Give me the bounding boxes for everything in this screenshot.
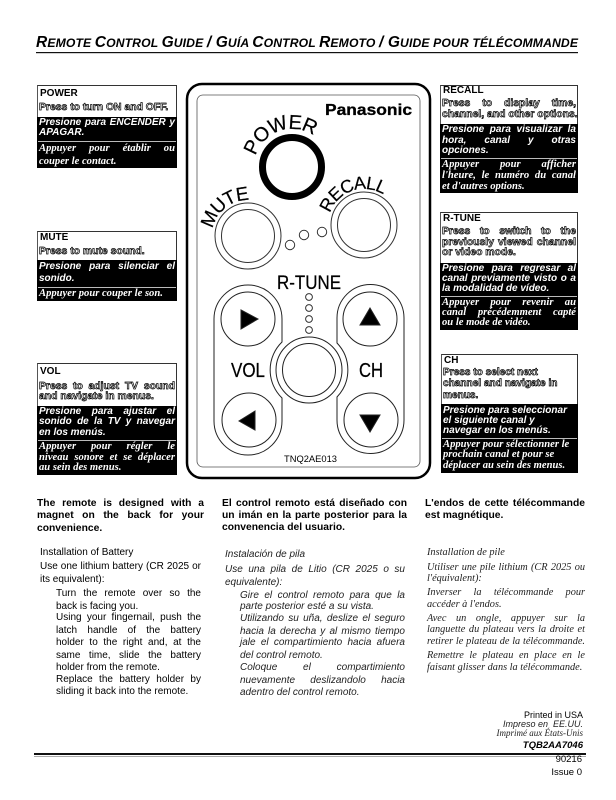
- text block: english instructions: back is facing you.: [56, 601, 138, 612]
- panel: vol callout: and navigate in menus.: [39, 391, 154, 402]
- text block: spanish instructions: [222, 498, 408, 698]
- text block: spanish instructions: El control remoto está diseñado con: [222, 498, 407, 509]
- mute button: [200, 186, 282, 270]
- panel: recall callout: channel, and other options.: [442, 109, 578, 120]
- power button: POWER: [243, 114, 317, 154]
- panel: ch callout: menus.: [443, 390, 478, 401]
- footer issue number: [551, 754, 582, 778]
- panel: recall callout: Presione para visualizar la: [442, 124, 576, 135]
- text block: english instructions: holder from the remote.: [56, 662, 160, 673]
- panel: ch callout: Presione para seleccionar: [443, 405, 567, 416]
- panel: recall callout: et d'autres options.: [442, 181, 525, 192]
- panel: mute callout: Appuyer pour couper le son.: [39, 288, 163, 299]
- footer imprint: [496, 710, 584, 751]
- panel: r-tune callout: ou le mode de vidéo.: [442, 317, 531, 328]
- panel: recall callout: [440, 85, 578, 193]
- panel: r-tune callout: la modalidad de vídeo.: [442, 283, 549, 294]
- footer imprint: Imprimé aux États-Unis: [496, 728, 583, 738]
- text block: french instructions: languette du plateau vers la droite et: [427, 624, 585, 635]
- panel: power callout: Presione para ENCENDER y: [39, 117, 175, 128]
- text block: french instructions: l'équivalent):: [427, 573, 482, 584]
- r-tune label: R-TUNE: [277, 272, 341, 294]
- brand logo: Panasonic: [325, 102, 412, 119]
- text block: spanish instructions: nuevamente deslizandolo hacia: [240, 675, 405, 686]
- text block: spanish instructions: Utilizando su uña, deslize el seguro: [240, 613, 405, 624]
- text block: english instructions: sliding it back into the remote.: [56, 686, 188, 697]
- panel: r-tune callout: [440, 212, 578, 330]
- panel: recall callout: RECALL: [443, 85, 484, 96]
- text block: english instructions: Using your fingernail, push the: [56, 612, 201, 623]
- panel: r-tune callout: R-TUNE: [443, 213, 481, 224]
- text block: spanish instructions: convenencia del usuario.: [222, 522, 345, 533]
- text block: spanish instructions: un imán en la parte posterior para la: [222, 510, 407, 521]
- panel: vol callout: au sein des menus.: [39, 462, 121, 473]
- panel: ch callout: CH: [444, 355, 458, 366]
- text block: spanish instructions: jale el compartimiento hacia afuera: [240, 637, 405, 648]
- panel: r-tune callout: Presione para regresar al: [442, 263, 576, 274]
- text block: spanish instructions: Coloque el compartimiento: [240, 662, 405, 673]
- panel: power callout: Appuyer pour établir ou: [39, 143, 175, 154]
- footer issue number: Issue 0: [551, 767, 582, 778]
- panel: mute callout: Presione para silenciar el: [39, 261, 175, 272]
- panel: ch callout: el siguiente canal y: [443, 415, 535, 426]
- panel: recall callout: opciones.: [442, 145, 489, 156]
- panel: vol callout: Press to adjust TV sound: [39, 381, 175, 392]
- text block: english instructions: its equivalent):: [40, 574, 104, 585]
- text block: english instructions: Installation of Battery: [40, 547, 133, 558]
- text block: french instructions: est magnétique.: [425, 510, 503, 521]
- panel: recall callout: hora, canal y otras: [442, 135, 576, 146]
- text block: spanish instructions: equivalente):: [225, 577, 282, 588]
- recall button: [319, 176, 398, 258]
- text block: english instructions: magnet on the back for your: [37, 510, 204, 521]
- r-tune dots: [306, 294, 312, 333]
- panel: ch callout: déplacer au sein des menus.: [443, 460, 565, 471]
- footer imprint: Impreso en EE.UU.: [503, 719, 583, 729]
- vol rocker: VOL: [231, 360, 265, 382]
- panel: ch callout: navegar en los menús.: [443, 425, 551, 436]
- panel: r-tune callout: Appuyer pour revenir au: [442, 297, 576, 308]
- panel: vol callout: [37, 363, 177, 475]
- panel: ch callout: Appuyer pour sélectionner le: [443, 439, 569, 450]
- panel: power callout: APAGAR.: [39, 127, 84, 138]
- text block: french instructions: Remettre le plateau en place en le: [427, 650, 585, 661]
- text block: spanish instructions: Gire el control remoto para que la: [240, 590, 405, 601]
- footer rule: [34, 753, 586, 757]
- text block: spanish instructions: adentro del control remoto.: [240, 687, 360, 698]
- text block: french instructions: Utiliser une pile lithium (CR 2025 ou: [427, 562, 585, 573]
- footer issue number: 90216: [556, 754, 582, 765]
- panel: r-tune callout: previously viewed channel: [442, 237, 576, 248]
- vol rocker: [214, 285, 282, 455]
- panel: r-tune callout: or video mode.: [442, 247, 516, 258]
- panel: r-tune callout: canal previamente visto o a: [442, 273, 576, 284]
- text block: french instructions: accéder à l'endos.: [427, 599, 502, 610]
- panel: mute callout: sonido.: [39, 273, 75, 284]
- panel: power callout: couper le contact.: [39, 156, 116, 167]
- text block: spanish instructions: Use una pila de Litio (CR 2025 o su: [225, 564, 405, 575]
- text block: french instructions: faisant glisser dans la télécommande.: [427, 662, 582, 673]
- panel: power callout: Press to turn ON and OFF.: [39, 102, 168, 113]
- text block: spanish instructions: parte posterior esté a su vista.: [240, 601, 374, 612]
- panel: recall callout: Press to display time,: [442, 98, 576, 109]
- text block: spanish instructions: hacia la derecha y al mismo tiempo: [240, 626, 405, 637]
- ch rocker: CH: [359, 360, 383, 382]
- text block: english instructions: holder to the right and, at the: [56, 637, 201, 648]
- panel: recall callout: l'heure, le numéro du canal: [442, 170, 576, 181]
- text block: french instructions: L'endos de cette télécommande: [425, 498, 585, 509]
- panel: vol callout: en los menús.: [39, 427, 106, 438]
- remote body: [187, 84, 430, 478]
- ch rocker: [337, 284, 404, 454]
- footer imprint: Printed in USA: [524, 710, 583, 720]
- text block: english instructions: latch handle of the battery: [56, 625, 201, 636]
- panel: vol callout: niveau sonore et se déplacer: [39, 452, 175, 463]
- panel: vol callout: Appuyer pour régler le: [39, 441, 175, 452]
- text block: french instructions: Avec un ongle, appuyer sur la: [427, 613, 585, 624]
- text block: english instructions: The remote is designed with a: [37, 498, 204, 509]
- indicator dots: [285, 227, 327, 250]
- panel: mute callout: Press to mute sound.: [39, 246, 145, 257]
- text block: spanish instructions: Instalación de pila: [225, 549, 305, 560]
- power button: [243, 114, 325, 200]
- panel: recall callout: Appuyer pour afficher: [442, 159, 576, 170]
- title: REMOTE CONTROL GUIDE / GUÍA CONTROL REMOTO / GUIDE POUR TÉLÉCOMMANDE: [36, 34, 579, 51]
- text block: spanish instructions: del control remoto.: [240, 650, 323, 661]
- panel: ch callout: [441, 354, 578, 473]
- text block: english instructions: Turn the remote over so the: [56, 588, 201, 599]
- text block: french instructions: Inverser la télécommande pour: [427, 587, 585, 598]
- recall button: RECALL: [319, 176, 384, 212]
- r-tune button: [276, 337, 342, 403]
- panel: ch callout: Press to select next: [443, 367, 538, 378]
- text block: french instructions: retirer le plateau de la télécommande.: [427, 636, 585, 647]
- mute button: MUTE: [200, 186, 249, 228]
- text block: french instructions: [425, 498, 586, 673]
- panel: mute callout: MUTE: [40, 232, 68, 243]
- model number: TNQ2AE013: [284, 454, 337, 465]
- footer imprint: TQB2AA7046: [523, 740, 583, 751]
- text block: english instructions: convenience.: [37, 523, 102, 534]
- panel: mute callout: [37, 231, 177, 301]
- text block: french instructions: Installation de pile: [427, 547, 505, 558]
- text block: english instructions: [37, 498, 204, 697]
- panel: vol callout: VOL: [40, 366, 61, 377]
- text block: english instructions: Use one lithium battery (CR 2025 or: [40, 561, 201, 572]
- panel: vol callout: sonido de la TV y navegar: [39, 416, 175, 427]
- panel: r-tune callout: canal précédemment capté: [442, 307, 576, 318]
- panel: power callout: [37, 85, 177, 168]
- text block: english instructions: same time, slide the battery: [56, 650, 201, 661]
- panel: ch callout: channel and navigate in: [443, 378, 557, 389]
- panel: r-tune callout: Press to switch to the: [442, 226, 576, 237]
- panel: power callout: POWER: [40, 88, 78, 99]
- panel: vol callout: Presione para ajustar el: [39, 406, 175, 417]
- text block: english instructions: Replace the battery holder by: [56, 674, 201, 685]
- panel: ch callout: prochain canal et pour se: [443, 449, 554, 460]
